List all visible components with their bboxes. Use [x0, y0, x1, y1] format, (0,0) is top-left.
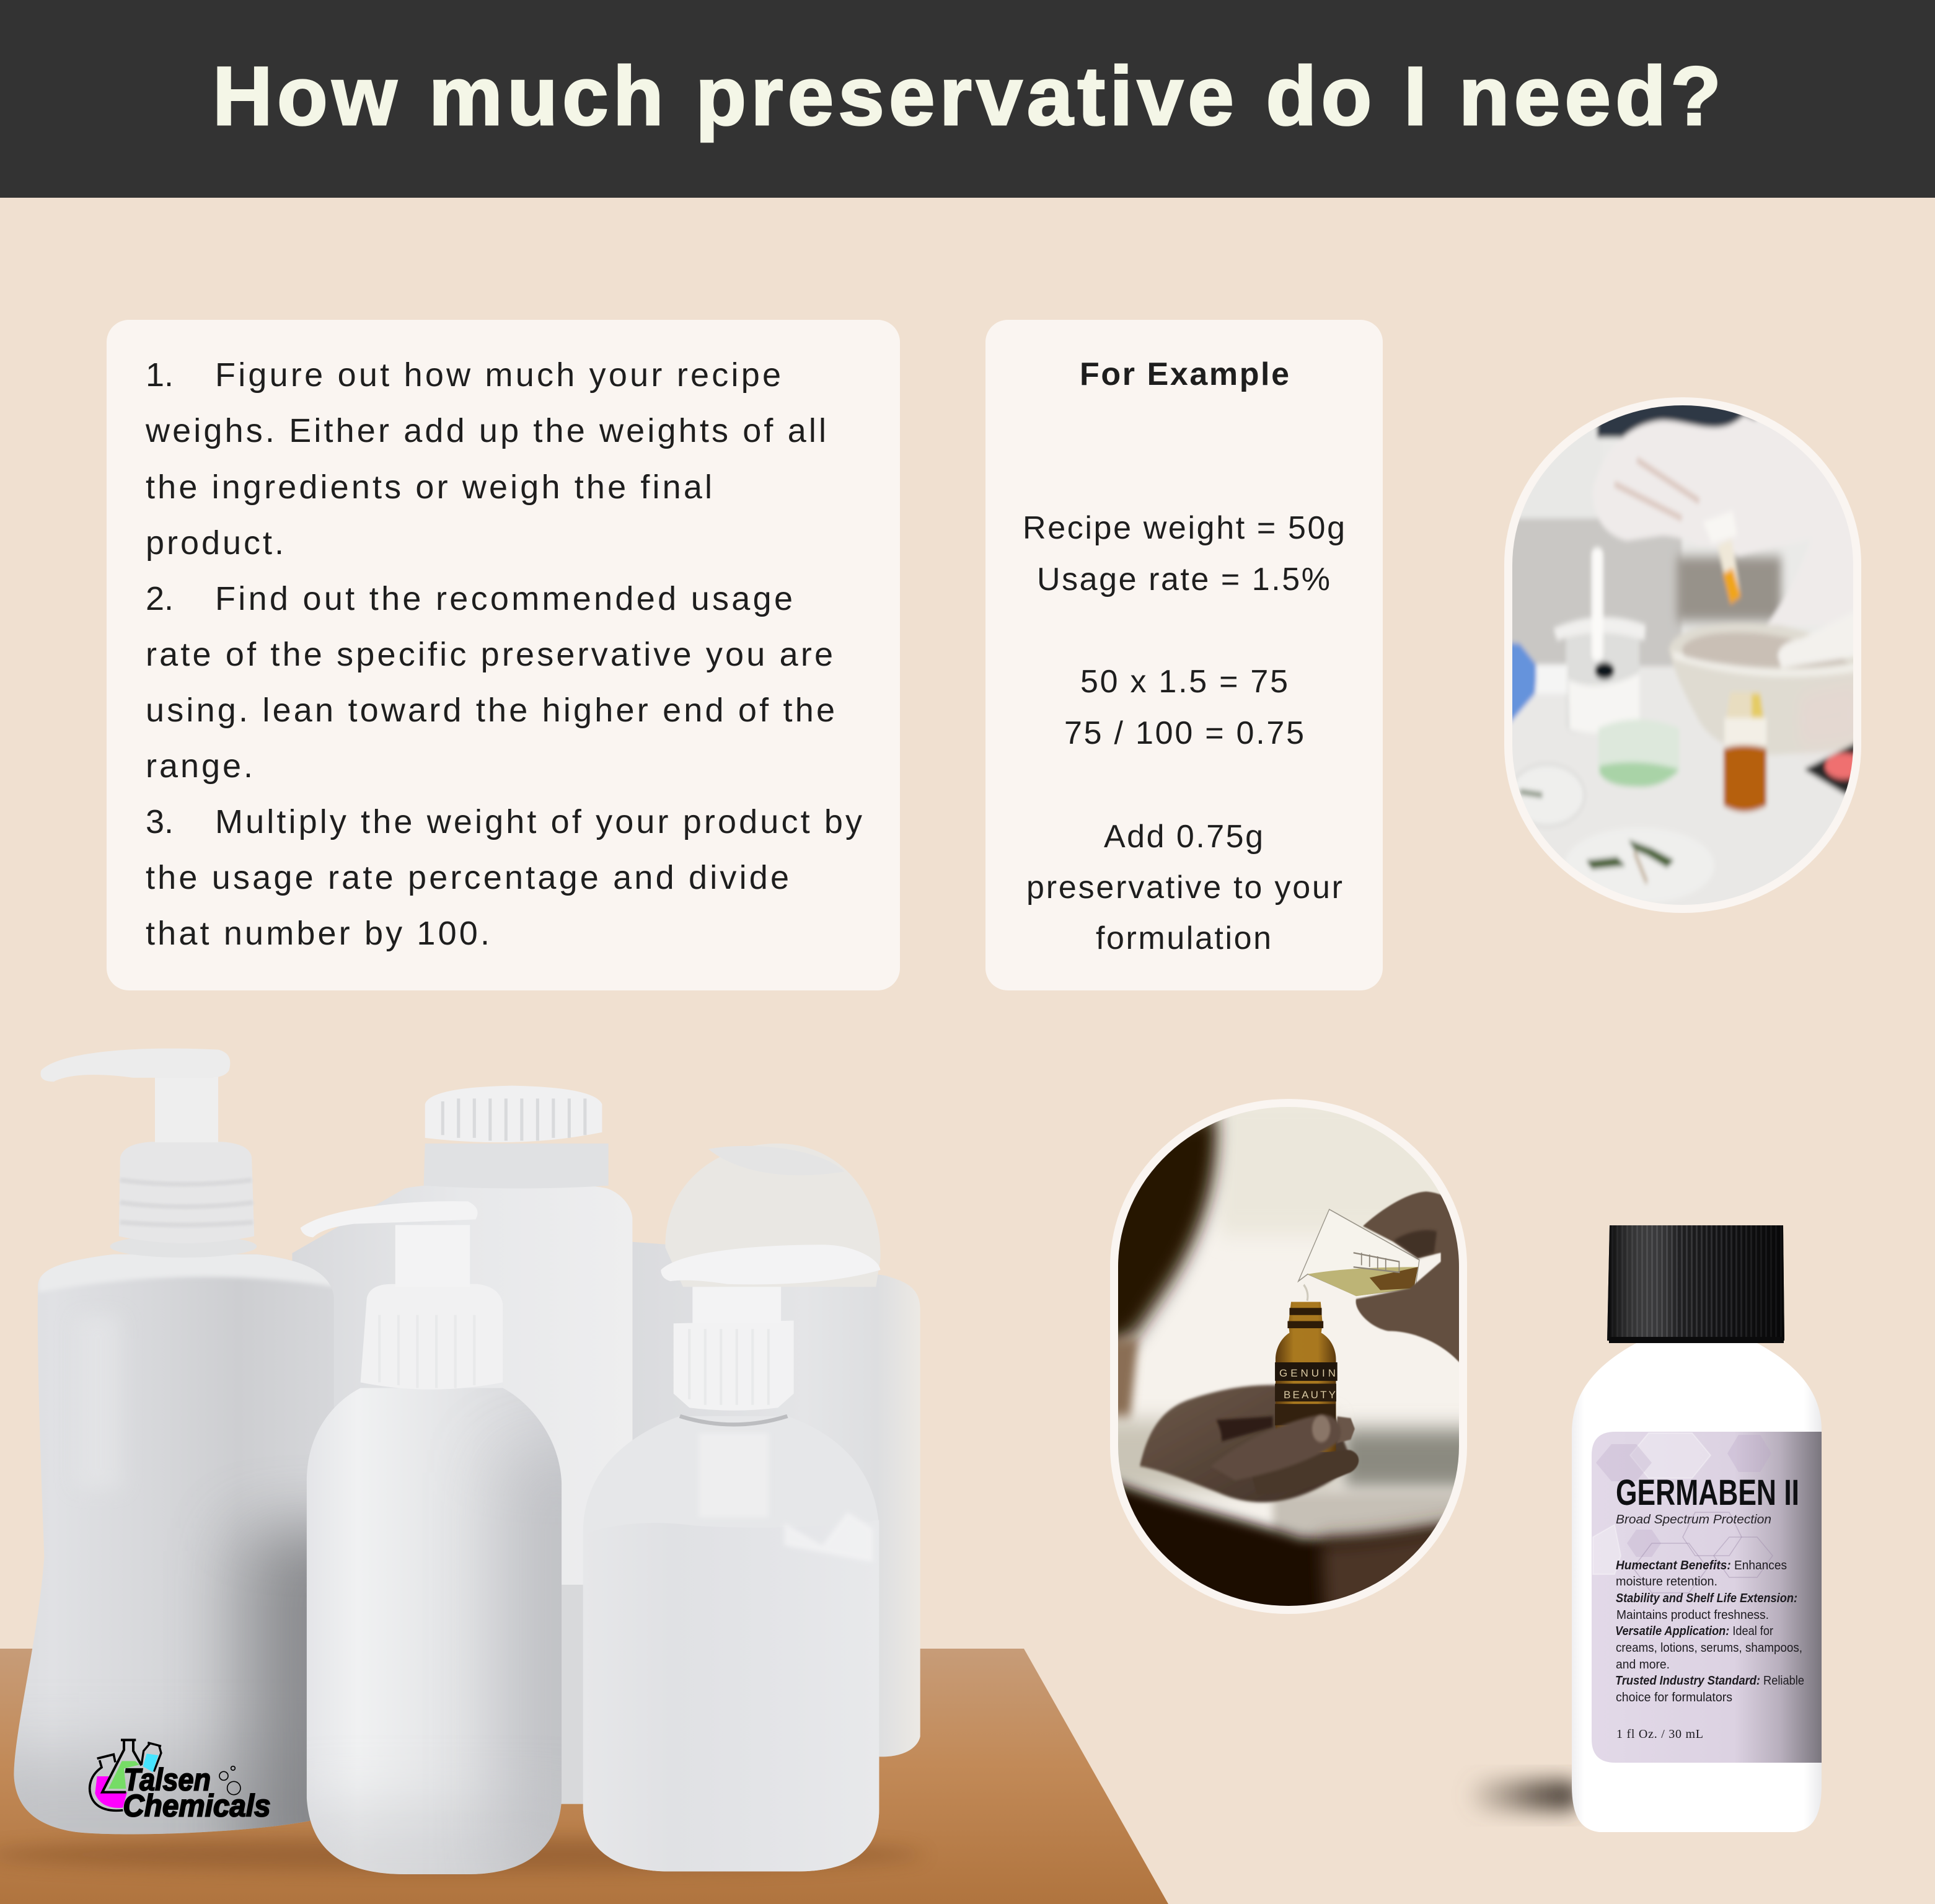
step 2 text — [146, 580, 835, 785]
label benefits: and more. — [1616, 1658, 1670, 1672]
example calculation: 75 / 100 = 0.75 — [1064, 715, 1304, 751]
front right clear bottle — [583, 1245, 880, 1871]
example result: Add 0.75g — [1104, 819, 1263, 855]
blue glove edge — [1512, 640, 1538, 725]
panel: worked example — [985, 320, 1383, 990]
example inputs: Recipe weight = 50g — [1023, 510, 1345, 546]
step 3 text: the usage rate percentage and divide — [146, 859, 789, 896]
step 1 text: product. — [146, 524, 284, 562]
brand logo: Talsen Chemicals — [90, 1740, 271, 1823]
step 2 text: 2. — [146, 580, 174, 617]
bottle label lettering: GENUIN — [1279, 1367, 1336, 1379]
beaker with spatula — [1565, 632, 1640, 684]
mortar bowl — [1669, 624, 1861, 755]
lower grey band — [1342, 1429, 1483, 1489]
step 1 text: the ingredients or weigh the final — [146, 469, 712, 506]
label benefits: Maintains product freshness. — [1616, 1608, 1769, 1622]
step 2 text: rate of the specific preservative you are — [146, 636, 833, 673]
panel: instructions — [107, 320, 900, 990]
step 1 text: Figure out how much your recipe — [215, 356, 781, 394]
example result: preservative to your — [1026, 870, 1342, 906]
back right bottle with dome — [632, 1144, 920, 1756]
example inputs: Usage rate = 1.5% — [1037, 562, 1330, 597]
icon: round flask — [90, 1755, 123, 1810]
left pump bottle — [0, 1049, 411, 1904]
label benefits: moisture retention. — [1616, 1575, 1717, 1589]
step 3 text: Multiply the weight of your product by — [215, 803, 862, 840]
step 2 text: Find out the recommended usage — [215, 580, 793, 617]
gloved hand and sleeve — [1598, 414, 1789, 627]
compact — [1803, 740, 1853, 797]
label hexagon pattern — [1593, 1433, 1773, 1593]
beaker — [1298, 1209, 1419, 1295]
icon: vial — [141, 1743, 161, 1771]
logo wordmark: Chemicals — [123, 1789, 271, 1823]
amber vial — [1727, 692, 1754, 718]
example inputs — [1023, 510, 1345, 597]
label benefits: creams, lotions, serums, shampoos, — [1616, 1641, 1802, 1655]
green jar — [1598, 718, 1678, 769]
icon: bubbles — [219, 1766, 240, 1795]
label benefits: Versatile Application: Ideal for — [1615, 1624, 1773, 1638]
step 1 text — [145, 356, 826, 562]
product: Germaben II bottle — [1469, 1225, 1822, 1832]
fingers over bottle — [1251, 1450, 1359, 1495]
label benefits — [1615, 1559, 1804, 1704]
example calculation — [1064, 664, 1304, 751]
amber bottle — [1276, 1302, 1336, 1452]
logo wordmark: Talsen — [123, 1762, 211, 1797]
step 2 text: range. — [146, 747, 253, 785]
photo: pouring oil into amber bottle — [1085, 1078, 1506, 1647]
step 3 text: 3. — [146, 803, 174, 840]
product photo: white cosmetic bottles — [0, 1049, 923, 1904]
label title: GERMABEN II — [1616, 1473, 1799, 1513]
step 3 text — [146, 803, 862, 952]
bottle label lettering — [1279, 1367, 1336, 1401]
dropper — [1706, 514, 1735, 540]
example calculation: 50 x 1.5 = 75 — [1080, 664, 1288, 700]
example heading: For Example — [1080, 356, 1289, 392]
title: How much preservative do I need? — [213, 50, 1721, 143]
step 3 text: that number by 100. — [146, 915, 490, 952]
header banner — [0, 0, 1935, 198]
label benefits: Stability and Shelf Life Extension: — [1616, 1592, 1797, 1605]
bottle label lettering: BEAUTY — [1284, 1389, 1336, 1401]
icon: conical flask — [102, 1740, 141, 1792]
bottle body — [1572, 1343, 1822, 1832]
product label — [1592, 1432, 1822, 1763]
lower hand palm — [1140, 1385, 1354, 1502]
wooden table — [0, 1649, 1168, 1904]
label subtitle: Broad Spectrum Protection — [1616, 1513, 1771, 1527]
label benefits: Trusted Industry Standard: Reliable — [1615, 1674, 1804, 1688]
step 1 text: weighs. Either add up the weights of all — [145, 412, 826, 449]
label benefits: choice for formulators — [1616, 1691, 1732, 1704]
dark shoulder — [1095, 1111, 1217, 1356]
upper hand — [1356, 1192, 1472, 1370]
back centre powder bottle — [292, 1086, 632, 1804]
bottle shadow — [1469, 1780, 1580, 1811]
step 1 text: 1. — [146, 356, 174, 394]
label benefits: Humectant Benefits: Enhances — [1616, 1559, 1787, 1572]
leaves — [1586, 857, 1626, 869]
contact shadow — [0, 1838, 923, 1871]
example result — [1026, 819, 1342, 956]
photo: lab dropper and mortar — [1504, 397, 1861, 913]
step 2 text: using. lean toward the higher end of the — [146, 692, 835, 729]
bottle label bands — [1275, 1362, 1338, 1381]
example result: formulation — [1096, 920, 1271, 956]
logo wordmark — [123, 1762, 271, 1823]
bottom dark arm — [1101, 1477, 1483, 1647]
front centre bottle — [278, 1201, 607, 1904]
label volume: 1 fl Oz. / 30 mL — [1616, 1727, 1703, 1741]
bottle cap — [1607, 1225, 1784, 1343]
petri dishes — [1510, 764, 1585, 826]
